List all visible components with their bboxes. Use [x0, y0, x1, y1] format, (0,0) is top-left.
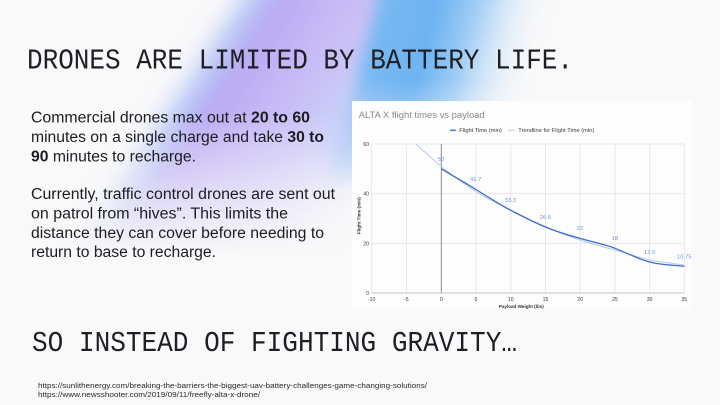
x axis labels: -5 [404, 297, 409, 303]
x axis labels: 15 [543, 297, 548, 303]
paragraph: flight and recharge times: 90 minutes to recharge. [31, 148, 196, 166]
x axis labels: 35 [681, 297, 687, 303]
closing heading: SO INSTEAD OF FIGHTING GRAVITY… [32, 328, 517, 360]
data labels [438, 157, 692, 260]
data labels: 33.3 [505, 198, 516, 204]
data labels: 12.5 [644, 250, 655, 256]
data labels: 18 [612, 236, 618, 242]
source links: https://www.newsshooter.com/2019/09/11/freefly-alta-x-drone/ [38, 390, 261, 399]
x axis labels: 5 [475, 297, 478, 303]
x axis labels: 30 [647, 297, 653, 303]
x axis labels: -10 [368, 297, 376, 303]
background gradient [95, 0, 534, 242]
x axis labels: 10 [508, 297, 514, 303]
source links: https://sunlithenergy.com/breaking-the-barriers-the-biggest-uav-battery-challenges-game-changing-solutions/ [38, 381, 428, 390]
y axis title: Flight Time (min) [356, 197, 362, 234]
paragraph: flight and recharge times: Commercial drones max out at 20 to 60 [31, 110, 310, 126]
data labels: 26.6 [540, 215, 551, 221]
paragraph: flight and recharge times [31, 110, 324, 166]
x axis labels: 25 [612, 297, 618, 303]
y axis labels: 0 [366, 291, 369, 297]
paragraph: hives: return to base to recharge. [31, 244, 216, 261]
data labels: 10.75 [677, 254, 692, 260]
chart legend [450, 128, 595, 134]
x axis labels: 0 [440, 297, 443, 303]
x axis labels: 20 [577, 297, 583, 303]
text block: drone battery limits [31, 110, 336, 261]
flight time line [441, 169, 684, 266]
x axis title: Payload Weight (lbs) [499, 304, 544, 309]
title: DRONES ARE LIMITED BY BATTERY LIFE. [27, 45, 573, 78]
y axis labels: 20 [363, 241, 369, 247]
y axis labels: 40 [363, 192, 369, 198]
chart title: ALTA X flight times vs payload [359, 110, 485, 120]
data labels: 22 [577, 226, 583, 232]
data labels: 50 [438, 157, 444, 163]
trendline [416, 144, 684, 265]
paragraph: hives: Currently, traffic control drones are sent out [31, 186, 336, 203]
chart legend: Flight Time (min) [459, 128, 502, 134]
data labels: 41.7 [470, 177, 481, 183]
paragraph: hives: distance they can cover before needing to [31, 225, 324, 242]
paragraph: hives: on patrol from “hives”. This limits the [31, 206, 288, 222]
paragraph: hives [31, 186, 336, 261]
chart panel [352, 101, 692, 310]
chart legend: Trendline for Flight Time (min) [518, 128, 595, 134]
y axis labels [363, 142, 369, 297]
y axis labels: 60 [363, 142, 369, 148]
chart: ALTA X flight times vs payload [352, 101, 692, 310]
source links [38, 381, 428, 399]
paragraph: flight and recharge times: minutes on a single charge and take 30 to [31, 129, 324, 146]
x axis labels [368, 297, 687, 303]
